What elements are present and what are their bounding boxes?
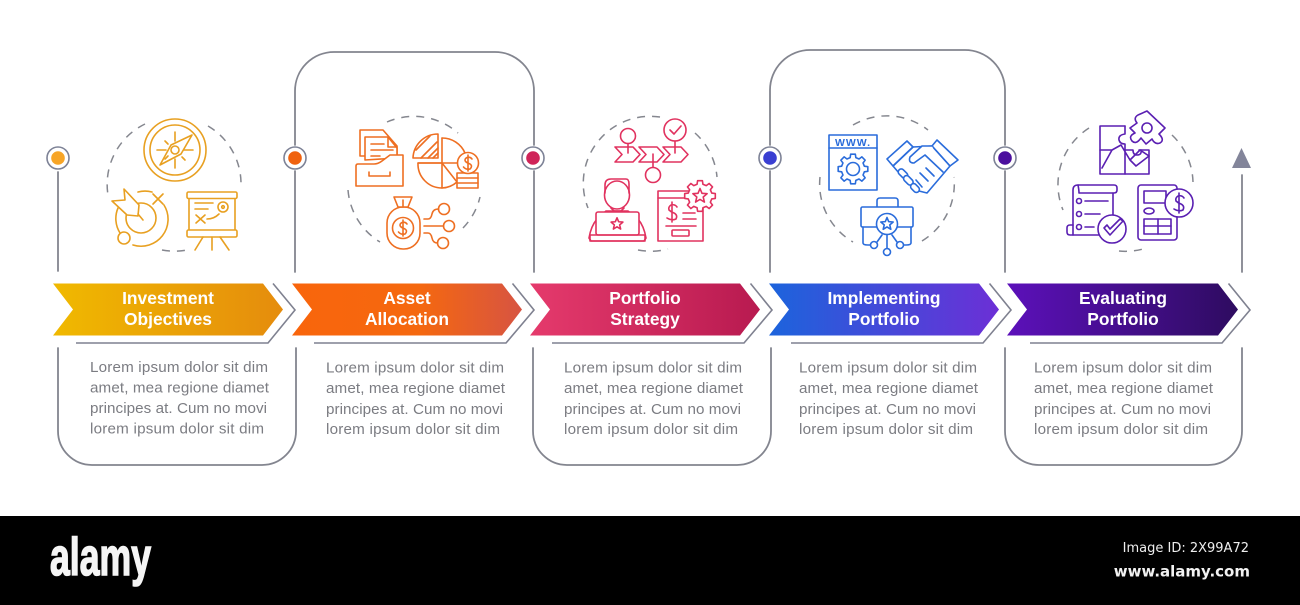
arrow banner 2: [292, 284, 522, 336]
arrow banner 1: [53, 284, 283, 336]
text block 2: principes at. Cum no movi: [326, 401, 503, 418]
timeline frame line: [58, 50, 1242, 465]
icon: workflow chevrons: [615, 119, 688, 182]
panel: step 4 implementing portfolio: [759, 116, 1011, 438]
arrow banner 4: [769, 284, 999, 336]
text block 4: Lorem ipsum dolor sit dim: [799, 360, 977, 376]
marker dot 4: [759, 147, 781, 169]
image id: Image ID: 2X99A72: [1123, 541, 1249, 556]
arrow banner 5: [1007, 284, 1238, 336]
text block 2: amet, mea regione diamet: [326, 380, 506, 397]
icon: briefcase network: [861, 198, 913, 256]
text block 5: amet, mea regione diamet: [1034, 380, 1214, 397]
panel: step 2 asset allocation: [284, 116, 534, 438]
text block 1: amet, mea regione diamet: [90, 380, 270, 396]
website: www.alamy.com: [1114, 562, 1250, 580]
heading 5: Portfolio: [1087, 309, 1159, 329]
icon: financial calculator: [1138, 185, 1193, 240]
heading 5: Evaluating: [1079, 288, 1167, 308]
heading 2: Allocation: [365, 309, 449, 329]
arrow outline 3: [552, 284, 772, 343]
icon: target with arrow: [112, 189, 168, 246]
heading 3: Strategy: [610, 309, 680, 329]
text block 5: principes at. Cum no movi: [1034, 401, 1211, 418]
text block 4: amet, mea regione diamet: [799, 380, 979, 397]
text block 1: lorem ipsum dolor sit dim: [90, 420, 264, 438]
text block 3: Lorem ipsum dolor sit dim: [564, 360, 742, 376]
icon: puzzle: [1100, 111, 1165, 174]
dashed ring 4: [820, 116, 954, 242]
dashed ring 2: [348, 116, 480, 242]
text block 1: Lorem ipsum dolor sit dim: [90, 359, 268, 376]
text block 5: Lorem ipsum dolor sit dim: [1034, 360, 1212, 376]
dashed ring 3: [583, 116, 717, 251]
arrow banner 3: [530, 284, 760, 336]
text block 4: principes at. Cum no movi: [799, 401, 976, 418]
text block 2: lorem ipsum dolor sit dim: [326, 421, 500, 438]
marker dot 1: [47, 147, 69, 169]
arrow outline 2: [314, 284, 534, 343]
marker dot 3: [522, 147, 544, 169]
icon: money bag with arrows: [387, 197, 454, 249]
heading 3: Portfolio: [609, 288, 681, 308]
heading 1: Investment: [122, 288, 214, 308]
footer bar: [0, 516, 1300, 605]
footer logo: alamy: [50, 528, 151, 587]
panel: step 5 evaluating portfolio: [994, 111, 1250, 438]
icon: person with laptop: [589, 179, 646, 241]
heading 1: Objectives: [124, 309, 212, 329]
text block 3: principes at. Cum no movi: [564, 401, 741, 418]
text block 2: Lorem ipsum dolor sit dim: [326, 360, 504, 376]
text block 3: lorem ipsum dolor sit dim: [564, 421, 738, 438]
marker dot 5: [994, 147, 1016, 169]
panel: step 3 portfolio strategy: [522, 116, 772, 438]
icon: strategy board: [187, 192, 237, 250]
text block 4: lorem ipsum dolor sit dim: [799, 421, 973, 438]
icon: settings invoice: [658, 181, 715, 241]
icon: website settings: WWW.: [835, 137, 871, 149]
heading 2: Asset: [383, 288, 431, 308]
icon: website settings: [829, 135, 877, 190]
heading 4: Implementing: [827, 288, 941, 308]
arrow outline 4: [791, 284, 1011, 343]
icon: handshake: [887, 140, 958, 194]
icon: pie chart with coins: [413, 134, 478, 188]
panel: step 1 investment objectives: [47, 119, 295, 438]
icon: document folder: [356, 130, 403, 186]
dashed ring 1: [107, 124, 241, 251]
marker dot 2: [284, 147, 306, 169]
text block 5: lorem ipsum dolor sit dim: [1034, 421, 1208, 438]
heading 4: Portfolio: [848, 309, 920, 329]
dashed ring 5: [1058, 128, 1193, 251]
icon: compass: [144, 119, 206, 181]
arrow head: end of timeline: [1232, 148, 1251, 168]
text block 1: principes at. Cum no movi: [90, 400, 267, 417]
arrow outline 1: [76, 284, 295, 343]
text block 3: amet, mea regione diamet: [564, 380, 744, 397]
icon: checklist scroll: [1067, 185, 1126, 243]
arrow outline 5: [1030, 284, 1250, 343]
